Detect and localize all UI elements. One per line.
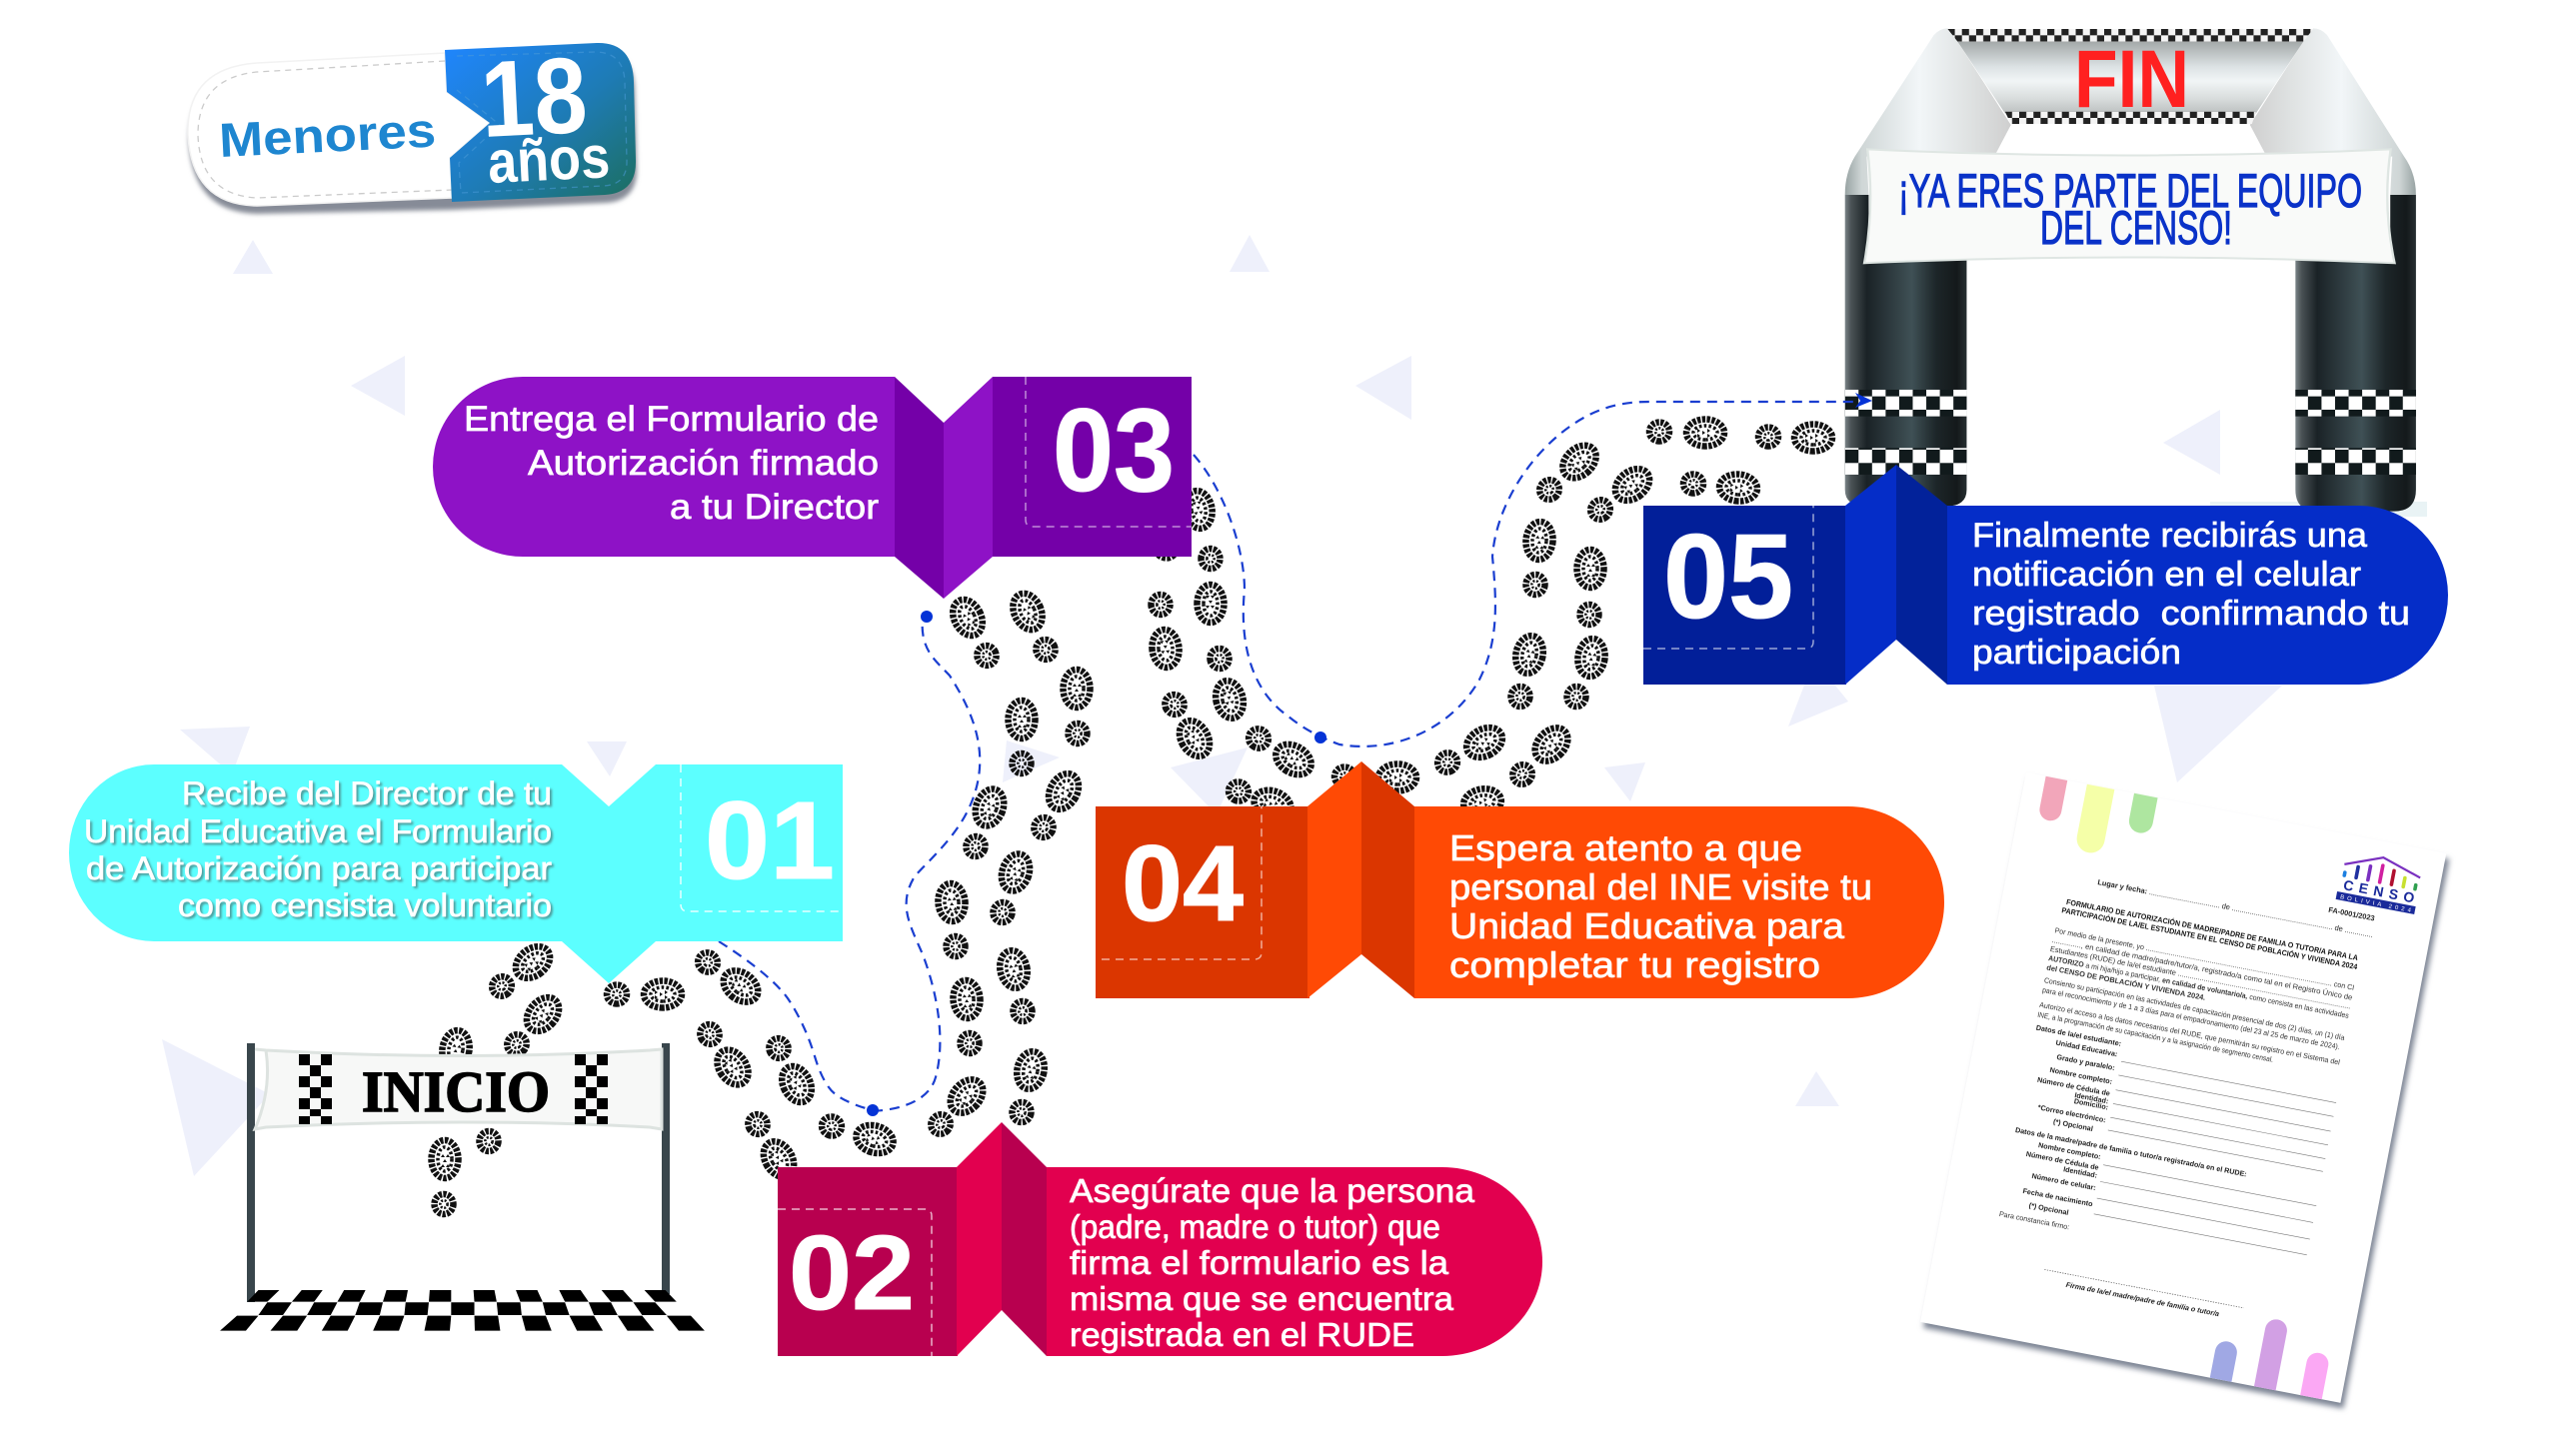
- form student fields: *Correo electrónico:: [2037, 1102, 2107, 1124]
- gate posts: [247, 1043, 670, 1302]
- panel 05: [1643, 465, 2448, 685]
- arch banner message: DEL CENSO!: [2040, 201, 2232, 254]
- form guardian fields: Identidad:: [2062, 1164, 2098, 1180]
- authorization form document: [1920, 772, 2446, 1403]
- form guardian fields: (*) Opcional: [2028, 1200, 2069, 1217]
- start banner cloth: [255, 1049, 662, 1129]
- panel 05 text: [1972, 517, 2410, 672]
- panel 03 text: Entrega el Formulario de: [464, 400, 879, 439]
- panel 02: [778, 1122, 1542, 1356]
- form guardian fields: Número de celular:: [2031, 1171, 2097, 1192]
- form student fields: Domicilio:: [2073, 1096, 2109, 1111]
- panel 02 text: misma que se encuentra: [1070, 1280, 1454, 1317]
- banner text: INICIO: [362, 1059, 550, 1124]
- banner checker left: [299, 1054, 332, 1124]
- badge: Menores 18 años: Menores: [218, 104, 437, 168]
- form body text: Estudiantes (RUDE) de la/el estudiante ......................................................................................: [2049, 944, 2351, 1011]
- panel 05 text: Finalmente recibirás una: [1972, 517, 2367, 555]
- form guardian fields: Número de Cédula de: [2025, 1149, 2099, 1172]
- panel 02 text: Asegúrate que la persona: [1070, 1172, 1475, 1209]
- footprints trail: [432, 420, 1832, 1214]
- panel 02 text: registrada en el RUDE: [1070, 1316, 1414, 1353]
- panel 04 text: Unidad Educativa para: [1449, 905, 1845, 946]
- panel 03 text: Autorización firmado: [528, 444, 879, 483]
- panel 01 text: [84, 775, 552, 923]
- panel 02 text: [1070, 1172, 1475, 1353]
- badge: Menores 18 años: años: [486, 123, 611, 196]
- icon: censo bolivia logo: CENSO: [2342, 876, 2416, 906]
- form title: PARTICIPACIÓN DE LA/EL ESTUDIANTE EN EL CENSO DE POBLACIÓN Y VIVIENDA 2024: [2061, 905, 2359, 971]
- arch label: FIN: FIN: [2074, 34, 2189, 125]
- form student fields: Grado y paralelo:: [2056, 1052, 2116, 1072]
- panel 05 text: registrado confirmando tu: [1972, 595, 2410, 633]
- icon: censo bolivia logo: [2336, 850, 2424, 914]
- form student fields: [2018, 1023, 2340, 1177]
- arch banner message: [1898, 164, 2362, 254]
- form top color tabs: [2033, 776, 2158, 863]
- dashed route lines: [719, 402, 1859, 1111]
- form student fields: (*) Opcional: [2052, 1117, 2094, 1133]
- panel 01 text: como censista voluntario: [178, 887, 552, 923]
- form student fields: Número de Cédula de: [2036, 1075, 2111, 1098]
- panel 01 text: Unidad Educativa el Formulario: [84, 813, 552, 849]
- panel 05 text: participación: [1972, 634, 2181, 672]
- panel 04 text: personal del INE visite tu: [1449, 866, 1872, 907]
- form body text: Por medio de la presente, yo ................................................................................................ con CI: [2054, 925, 2355, 992]
- form code: FA-0001/2023: [2328, 905, 2375, 922]
- panel 04 text: [1449, 827, 1872, 985]
- form body text: .............., en calidad de madre/padre/tutor/a, registrado/a como tal en el Registro Único de: [2051, 935, 2353, 1002]
- form body text: AUTORIZO a mi hija/hijo a participar, en calidad de voluntario/a, como censista en las actividades: [2047, 953, 2350, 1020]
- icon: censo bolivia logo: BOLIVIA 2024: [2339, 894, 2412, 914]
- panel 03: [433, 377, 1192, 599]
- form body text: Consiento su participación en las actividades de capacitación presencial de dos (2) días, un (1) día: [2043, 975, 2346, 1042]
- route markers and arrow: [867, 393, 1872, 1116]
- panel 04: [1096, 761, 1944, 998]
- panel 01: [69, 764, 843, 983]
- finish arch: [1845, 28, 2427, 517]
- badge: Menores 18 años: 18: [478, 34, 590, 160]
- form body text: del CENSO DE POBLACIÓN Y VIVIENDA 2024.: [2046, 962, 2206, 1002]
- panel 04 text: Espera atento a que: [1449, 827, 1802, 868]
- panel 01 number: 01: [705, 779, 835, 902]
- form student fields: Identidad:: [2074, 1090, 2109, 1105]
- arch banner message: ¡YA ERES PARTE DEL EQUIPO: [1898, 164, 2362, 217]
- panel 03 number: 03: [1053, 385, 1175, 517]
- panel 01 text: de Autorización para participar: [86, 850, 552, 886]
- panel 02 number: 02: [789, 1214, 915, 1332]
- form guardian fields: [1998, 1125, 2320, 1276]
- form signature: Firma de la/el madre/padre de familia o tutor/a: [2065, 1280, 2220, 1318]
- panel 04 text: completar tu registro: [1449, 944, 1820, 985]
- panel 05 text: notificación en el celular: [1972, 556, 2361, 594]
- form guardian fields: Fecha de nacimiento: [2022, 1186, 2094, 1208]
- form body text: Autorizo el acceso a los datos necesarios del RUDE, que permitirán su registro en el Sistema del: [2038, 1000, 2341, 1067]
- start gate: INICIO: [220, 1043, 705, 1331]
- form title: FORMULARIO DE AUTORIZACIÓN DE MADRE/PADRE DE FAMILIA O TUTOR/A PARA LA: [2065, 897, 2359, 962]
- form guardian fields: Datos de la madre/padre de familia o tutor/a registrado/a en el RUDE:: [2014, 1125, 2247, 1178]
- banner checker right: [575, 1054, 608, 1124]
- panel 03 text: [464, 400, 879, 527]
- form body text: para el reconocimiento y de 1 a 3 días para el empadronamiento (del 23 al 25 de marzo de 2024).: [2041, 985, 2341, 1051]
- form signature: [2041, 1269, 2244, 1323]
- panel 02 text: (padre, madre o tutor) que: [1070, 1208, 1440, 1245]
- form body text: [2037, 925, 2356, 1076]
- panel 02 text: firma el formulario es la: [1070, 1244, 1449, 1281]
- panel 04 number: 04: [1122, 822, 1244, 943]
- form student fields: Unidad Educativa:: [2055, 1038, 2118, 1058]
- badge: Menores 18 años: [188, 34, 637, 214]
- form student fields: Nombre completo:: [2049, 1065, 2113, 1086]
- form guardian fields: Para constancia firmo:: [1998, 1209, 2070, 1231]
- form guardian fields: Nombre completo:: [2037, 1140, 2101, 1161]
- panel 01 text: Recibe del Director de tu: [182, 775, 552, 811]
- form bottom color tabs: [2210, 1309, 2335, 1399]
- background triangles: [162, 235, 2282, 1176]
- form place and date: Lugar y fecha: ................................... de .................................................. de ..............: [2097, 877, 2374, 939]
- checkered floor: [220, 1290, 705, 1331]
- form body text: INE, a la programación de su capacitación y a la asignación de segmento censal.: [2037, 1010, 2274, 1064]
- panel 05 number: 05: [1663, 510, 1793, 644]
- panel 03 text: a tu Director: [670, 488, 879, 527]
- form student fields: Datos de la/el estudiante:: [2035, 1023, 2122, 1048]
